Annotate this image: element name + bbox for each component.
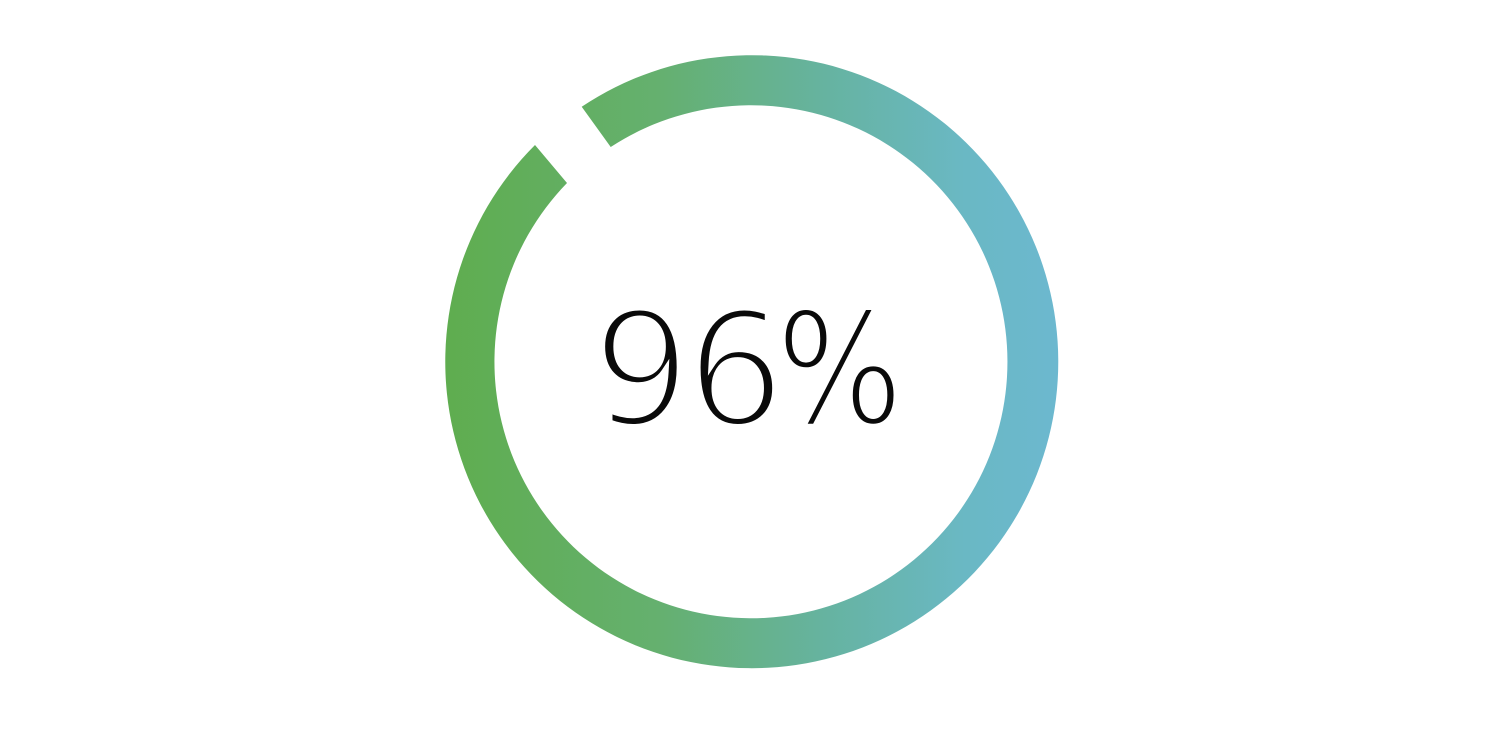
percentage value: % — [776, 280, 903, 462]
percentage value — [592, 278, 903, 464]
percentage value: 96 — [592, 278, 780, 464]
progress ring arc — [445, 55, 1058, 668]
